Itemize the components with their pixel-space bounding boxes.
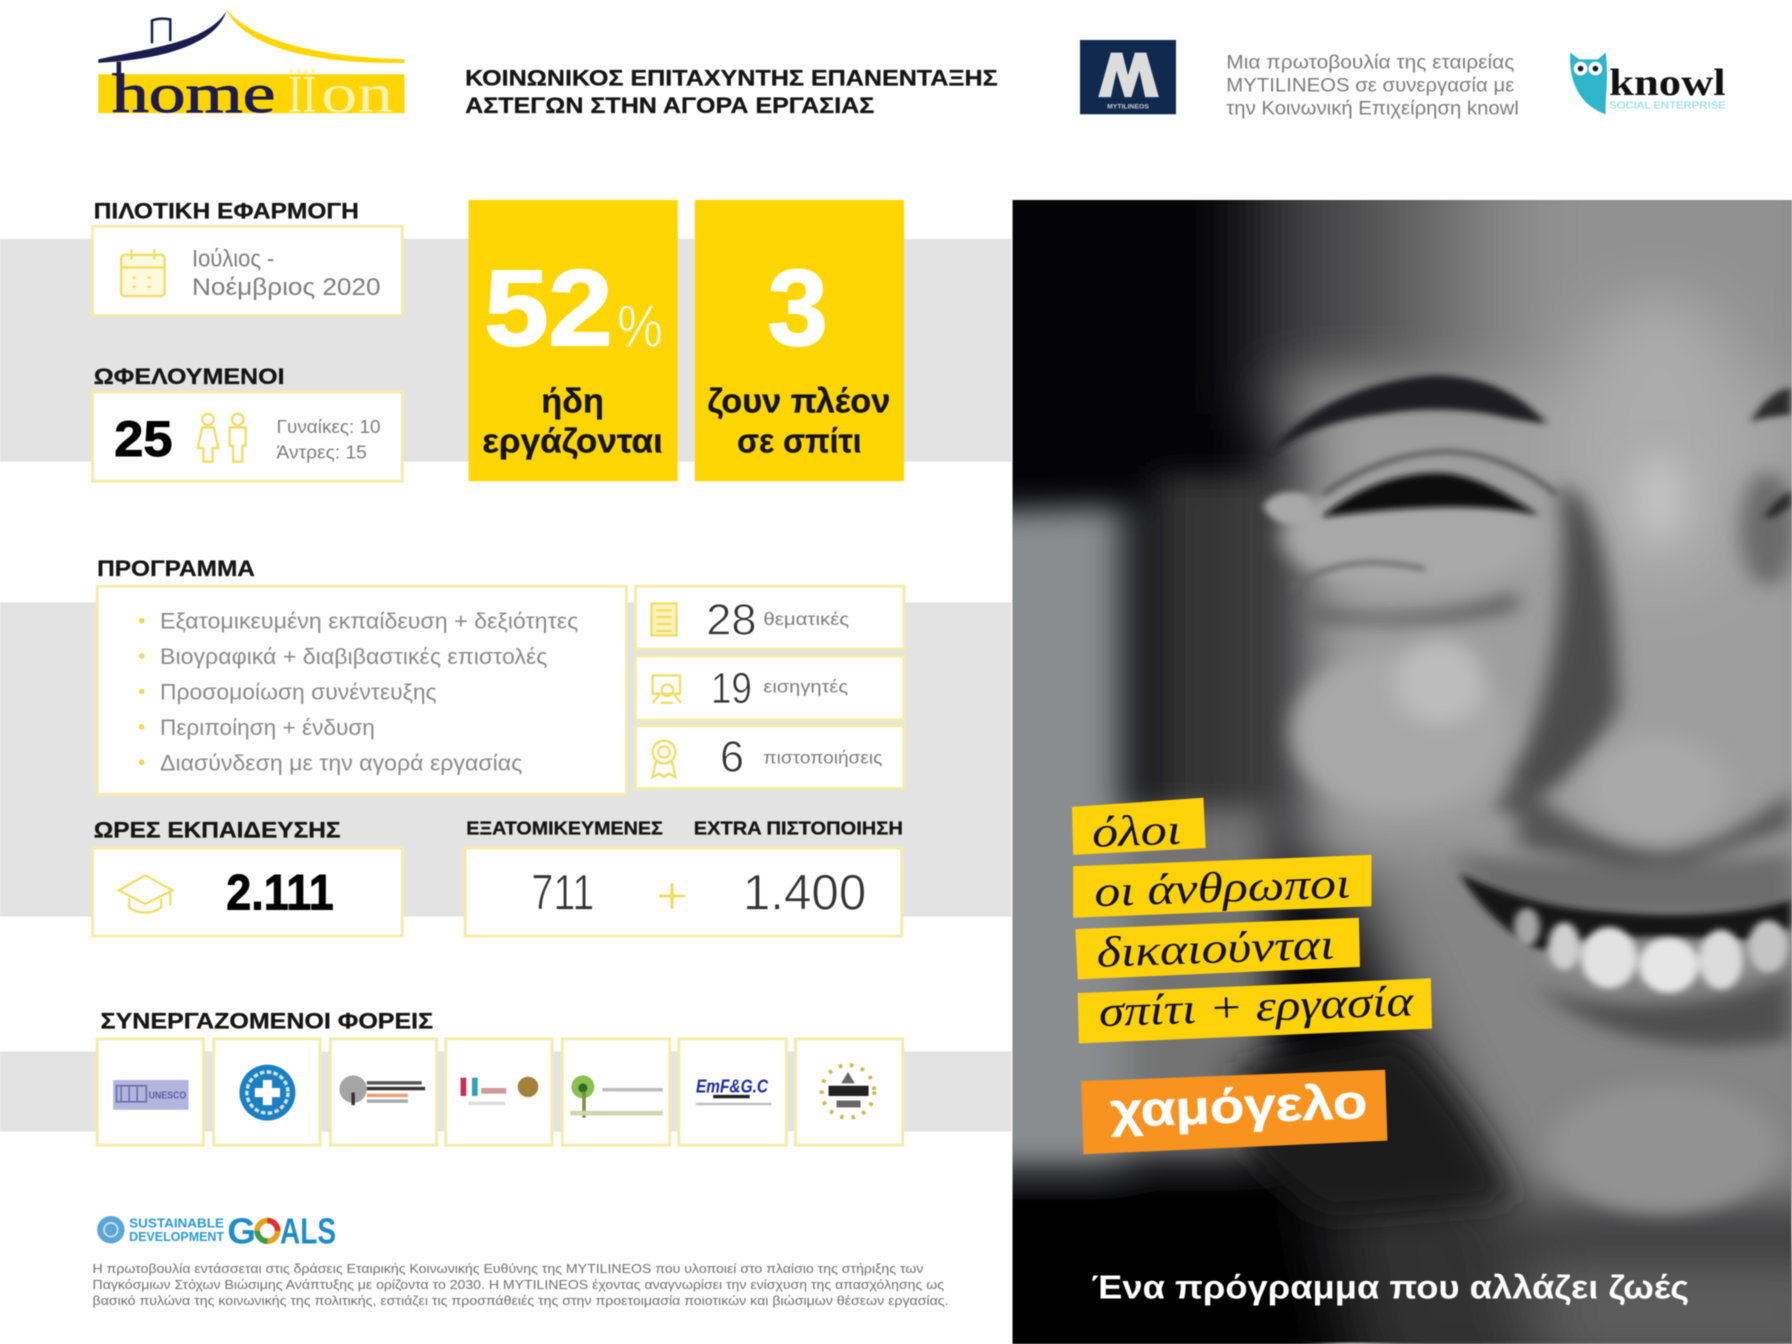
soft facial modelling [1281, 472, 1792, 1214]
stat: 3 housed: σε σπίτι [737, 423, 862, 461]
jaw shadow and nose bridge highlight [1236, 453, 1684, 1218]
slogan strips: δικαιούνται [1096, 921, 1335, 977]
large face tones [1246, 85, 1792, 1344]
text block: CSR note: βασικό πυλώνα της κοινωνικής της πολιτικής, εστιάζει τις προσπάθειές της στην προετοιμασία ποιοτικών και βιώσιμων θέσεων εργασίας. [93, 1293, 949, 1308]
initiative text: MYTILINEOS σε συνεργασία με [1226, 74, 1515, 96]
headings: hours split: ΕΞΑΤΟΜΙΚΕΥΜΕΝΕΣ [466, 817, 663, 838]
brows, eyes and mouth [1263, 375, 1791, 981]
initiative text: Μια πρωτοβουλία της εταιρείας [1226, 52, 1514, 74]
stat: 52% employed: ήδη [541, 383, 604, 421]
heading: beneficiaries: ΩΦΕΛΟΥΜΕΝΟΙ [94, 364, 285, 389]
logo: star ring [795, 1039, 903, 1145]
logo: green tree [562, 1039, 670, 1145]
panel: 28 topics: 28 [706, 596, 757, 644]
stat: 52% employed: 52 [485, 248, 613, 368]
logo: sustainable development goals: G [227, 1210, 256, 1251]
stat: 52% employed: % [617, 292, 663, 359]
icon: rosette [653, 741, 675, 777]
logo: blue wordmark [679, 1039, 786, 1145]
panel: pilot dates: Νοέμβριος 2020 [192, 274, 381, 301]
panel: total hours: 2.111 [226, 864, 334, 921]
panel: total hours [93, 848, 402, 936]
panel: 19 speakers: εισηγητές [763, 677, 848, 697]
stat: 3 housed: 3 [768, 248, 828, 368]
logo: sustainable development goals: ALS [280, 1210, 336, 1251]
slogan strips [1072, 798, 1432, 1043]
icon: calendar [121, 249, 165, 296]
logo: homeΠon: ΪΪ [288, 66, 317, 124]
panel: pilot dates [93, 226, 402, 315]
panel: beneficiaries: 25 [114, 410, 173, 467]
stat: 52% employed: εργάζονται [482, 423, 663, 461]
panel: 6 certifications [635, 726, 904, 789]
logo: homeΠon: home [112, 63, 275, 124]
panel: hours split: 711 [531, 864, 594, 921]
panel: programme list: Εξατομικευμένη εκπαίδευση + δεξιότητες [160, 609, 579, 634]
panel: 19 speakers: 19 [711, 665, 752, 713]
heading: programme: ΠΡΟΓΡΑΜΜΑ [97, 556, 255, 581]
heading: partners: ΣΥΝΕΡΓΑΖΟΜΕΝΟΙ ΦΟΡΕΙΣ [101, 1009, 433, 1034]
panel: programme list: Προσομοίωση συνέντευξης [160, 679, 437, 704]
headline: ΚΟΙΝΩΝΙΚΟΣ ΕΠΙΤΑΧΥΝΤΗΣ ΕΠΑΝΕΝΤΑΞΗΣ [465, 66, 998, 91]
panel: programme list [97, 586, 626, 794]
headline [465, 66, 998, 118]
text block: CSR note: Παγκόσμιων Στόχων Βιώσιμης Ανάπτυξης με ορίζοντα το 2030. Η MYTILINEOS έχοντας αναγνωρίσει την ενίσχυση της απασχόλησης ως [93, 1277, 944, 1292]
heading: training hours: ΩΡΕΣ ΕΚΠΑΙΔΕΥΣΗΣ [94, 818, 341, 843]
panel: 28 topics [635, 586, 904, 649]
callout: smile: χαμόγελο [1109, 1076, 1368, 1138]
icon: graduation cap [119, 875, 173, 913]
text block: CSR note: Η πρωτοβουλία εντάσσεται στις δράσεις Εταιρικής Κοινωνικής Ευθύνης της MYTILINEOS που υλοποιεί στο πλαίσιο της στήριξης των [93, 1261, 924, 1276]
headings: hours split: EXTRA ΠΙΣΤΟΠΟΙΗΣΗ [694, 817, 903, 838]
logo: sustainable development goals: DEVELOPMENT [129, 1229, 224, 1244]
slogan strips: σπίτι + εργασία [1098, 977, 1415, 1036]
logo: sustainable development goals: SUSTAINABLE [129, 1215, 224, 1230]
panel: beneficiaries [93, 392, 402, 481]
icon: people [198, 414, 246, 462]
logo: UNESCO [97, 1039, 203, 1145]
logo: MYTILINEOS [1080, 40, 1176, 114]
panel: 6 certifications: πιστοποιήσεις [763, 747, 882, 767]
logo: MYTILINEOS: MYTILINEOS [1107, 104, 1149, 111]
logo: knowl owl [1570, 53, 1726, 114]
photo: smiling woman [1012, 199, 1792, 1344]
logo: knowl owl: knowl [1609, 62, 1726, 104]
logo: blue wordmark: EmF&G.C [696, 1076, 769, 1097]
slogan strips: οι άνθρωποι [1094, 859, 1351, 916]
text block: CSR note [93, 1261, 949, 1308]
panel: programme list: Βιογραφικά + διαβιβαστικές επιστολές [160, 644, 548, 669]
callout: smile [1081, 1070, 1387, 1154]
tagline: Ένα πρόγραμμα που αλλάζει ζωές [1091, 1269, 1689, 1306]
logo: sustainable development goals [97, 1210, 336, 1251]
stat: 52% employed [469, 200, 678, 481]
logo: knowl owl: SOCIAL ENTERPRISE [1609, 101, 1726, 112]
heading: pilot: ΠΙΛΟΤΙΚΗ ΕΦΑΡΜΟΓΗ [94, 198, 359, 223]
panel: hours split [465, 848, 902, 936]
panel: hours split: 1.400 [743, 864, 866, 921]
panel: pilot dates: Ιούλιος - [192, 245, 274, 272]
background tones [1012, 462, 1362, 1344]
slogan strips: όλοι [1091, 806, 1182, 857]
stat: 3 housed [695, 200, 904, 481]
initiative text: την Κοινωνική Επιχείρηση knowl [1226, 97, 1519, 119]
logo: homeΠon: on [321, 63, 393, 124]
logo: blue cross [214, 1039, 320, 1145]
teeth [1514, 908, 1788, 993]
headline: ΑΣΤΕΓΩΝ ΣΤΗΝ ΑΓΟΡΑ ΕΡΓΑΣΙΑΣ [465, 93, 874, 118]
logo: tree institute [330, 1039, 437, 1145]
panel: 28 topics: θεματικές [763, 609, 849, 629]
panel: 19 speakers [635, 656, 904, 720]
panel: partner logos [97, 1039, 903, 1145]
icon: list [651, 603, 677, 635]
logo: UNESCO: UNESCO [149, 1090, 186, 1101]
icon: presenter [653, 675, 681, 703]
stat: 3 housed: ζουν πλέον [707, 383, 890, 421]
panel: 6 certifications: 6 [720, 733, 744, 781]
initiative text [1226, 52, 1519, 119]
panel: beneficiaries: Γυναίκες: 10 [277, 416, 381, 437]
panel: programme list: Περιποίηση + ένδυση [160, 715, 375, 740]
logo: homeΠon [98, 8, 405, 124]
panel: beneficiaries: Άντρες: 15 [277, 441, 367, 462]
logo: ki [446, 1039, 552, 1145]
headings: hours split [466, 817, 903, 838]
panel: programme list: Διασύνδεση με την αγορά εργασίας [160, 750, 523, 775]
